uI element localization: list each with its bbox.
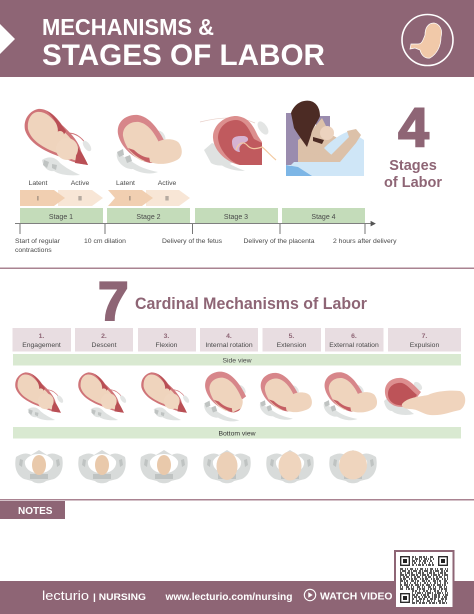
footer banner — [0, 551, 474, 614]
illustration: bottom view 2 — [78, 450, 126, 483]
side view bar — [13, 354, 461, 366]
illustration: external rotation — [324, 372, 377, 420]
illustration: engagement — [15, 372, 64, 420]
phase labels: Latent — [116, 180, 135, 187]
phase labels: Active — [71, 180, 89, 187]
illustration: stage 1 fetus in uterus — [25, 109, 93, 175]
illustration: stage 3 placenta delivery — [200, 116, 276, 171]
milestone labels: contractions — [15, 247, 52, 254]
milestone labels: 10 cm dilation — [84, 238, 126, 245]
time axis arrow — [15, 222, 375, 234]
header banner — [0, 0, 474, 77]
mechanism label boxes: 6. — [351, 333, 357, 340]
milestone labels — [15, 238, 397, 254]
illustration: extension — [260, 373, 312, 420]
stage labels: Stage 1 — [49, 214, 73, 221]
phase chevrons: I — [37, 196, 39, 202]
mechanism label boxes: 2. — [101, 333, 107, 340]
notes tab — [0, 501, 65, 519]
heading: 7 cardinal mechanisms: Cardinal Mechanisms of Labor — [135, 295, 368, 313]
illustration: bottom view 5 — [266, 450, 314, 483]
title: MECHANISMS & — [42, 14, 214, 40]
illustration: bottom view 4 — [203, 450, 251, 483]
title — [42, 14, 325, 72]
bottom view bar — [13, 427, 461, 438]
mechanism label boxes: Flexion — [156, 342, 178, 349]
stage labels — [49, 214, 336, 221]
illustration: bottom view 3 — [140, 450, 188, 483]
mechanism label boxes: Expulsion — [410, 342, 439, 349]
mechanism label boxes: External rotation — [329, 342, 379, 349]
heading: 4 stages of labor: 4 — [398, 96, 429, 158]
stage bars — [20, 208, 365, 223]
mechanism label boxes: 7. — [422, 333, 427, 340]
illustration: stage 4 mother holding newborn — [286, 101, 364, 176]
illustration: bottom view 1 — [15, 450, 63, 483]
heading: 4 stages of labor — [384, 96, 442, 191]
milestone labels: Delivery of the placenta — [244, 238, 315, 245]
phase chevrons: I — [129, 196, 131, 202]
mechanism label boxes: Extension — [277, 342, 307, 349]
stage labels: Stage 4 — [311, 214, 336, 221]
mechanism label boxes: Internal rotation — [205, 342, 253, 349]
white arrow marker — [0, 24, 15, 54]
lecturio nursing logo: | NURSING — [93, 592, 146, 603]
heading: 7 cardinal mechanisms: 7 — [98, 270, 129, 332]
QR code — [395, 551, 454, 608]
phase chevrons: II — [165, 196, 169, 202]
lecturio nursing logo — [42, 588, 146, 603]
phase labels: Latent — [29, 180, 48, 187]
mechanism label boxes — [12, 328, 461, 352]
heading: 4 stages of labor: of Labor — [384, 175, 442, 191]
side view illustrations — [15, 372, 465, 421]
timeline: labor stages — [15, 180, 397, 254]
phase chevrons — [20, 190, 190, 206]
watch video button: WATCH VIDEO — [320, 590, 392, 602]
phase chevrons: II — [78, 196, 82, 202]
phase labels — [29, 180, 176, 187]
bottom view bar: Bottom view — [218, 430, 256, 438]
mechanism label boxes: Descent — [92, 342, 117, 349]
notes tab: NOTES — [18, 506, 53, 517]
phase labels: Active — [158, 180, 176, 187]
illustration: internal rotation — [204, 372, 247, 421]
side view bar: Side view — [222, 358, 252, 364]
mechanism label boxes: 3. — [164, 333, 169, 340]
milestone labels: Start of regular — [15, 238, 61, 245]
bottom view illustrations — [15, 450, 377, 483]
illustration: expulsion — [384, 378, 465, 415]
panel: seven cardinal mechanisms — [12, 270, 465, 483]
illustration: stage 2 head crowning — [117, 115, 182, 173]
illustration: descent — [78, 372, 127, 420]
title: STAGES OF LABOR — [42, 39, 325, 72]
milestone labels: Delivery of the fetus — [162, 238, 223, 245]
mechanism label boxes: 4. — [226, 333, 232, 340]
illustration: flexion — [141, 372, 190, 420]
heading: 7 cardinal mechanisms — [98, 270, 368, 332]
website url: www.lecturio.com/nursing — [165, 591, 292, 603]
illustration: bottom view 6 — [329, 450, 377, 483]
panel: four stages illustrations — [25, 96, 442, 191]
mechanism label boxes: Engagement — [22, 342, 61, 349]
milestone labels: 2 hours after delivery — [333, 238, 397, 245]
mechanism label boxes: 5. — [289, 333, 294, 340]
lecturio nursing logo: lecturio — [42, 588, 89, 603]
icon: fetus in circle — [402, 14, 453, 66]
stage labels: Stage 3 — [224, 214, 248, 221]
mechanism label boxes: 1. — [39, 333, 44, 340]
heading: 4 stages of labor: Stages — [389, 158, 437, 174]
stage labels: Stage 2 — [136, 214, 161, 221]
